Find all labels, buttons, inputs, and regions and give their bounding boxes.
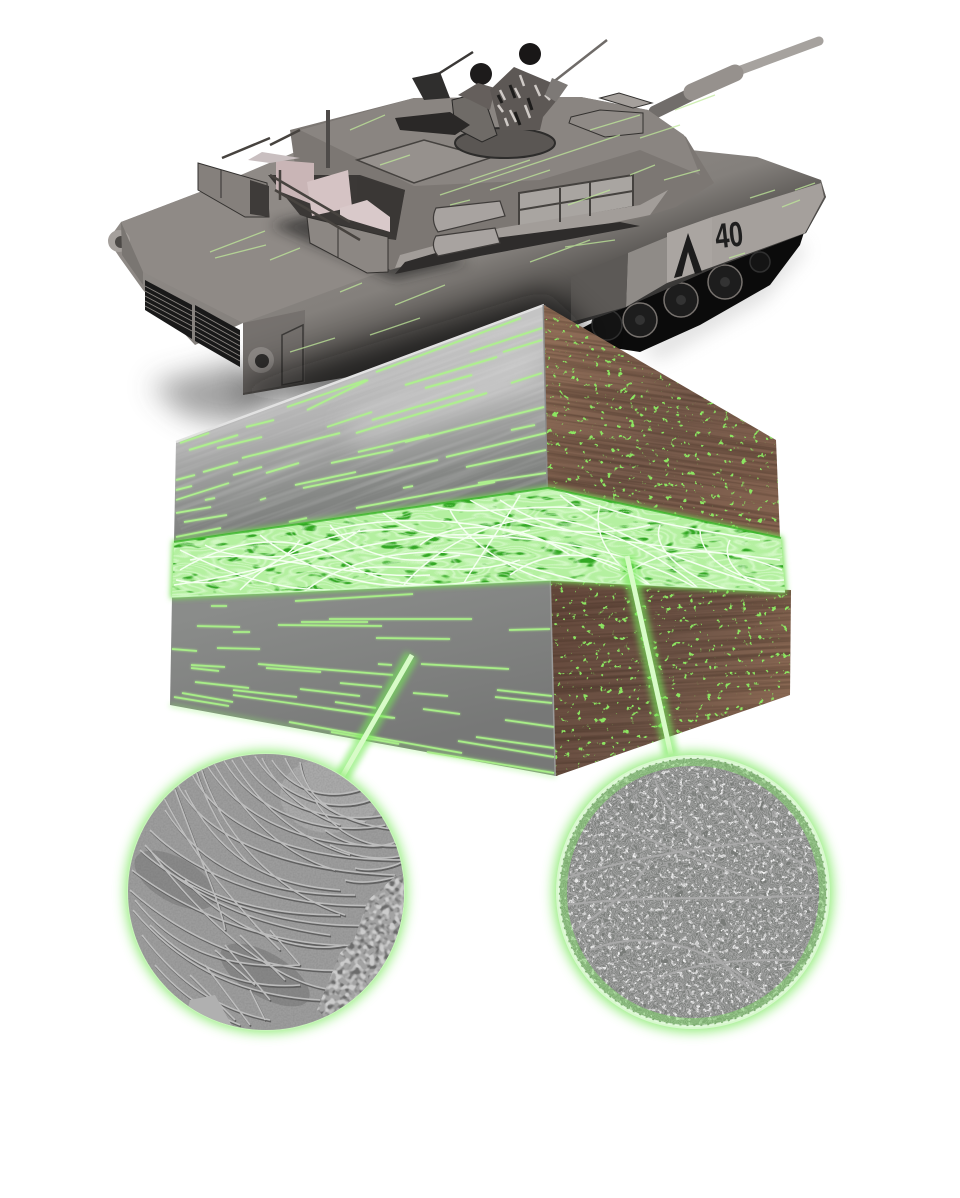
turret rails panel [519,175,633,227]
tank [108,40,826,400]
hull number: 40 [713,215,745,256]
fibres in bottom layer [172,594,554,773]
stowage bins [198,163,388,273]
fuel cylinders [433,201,505,256]
tank fibre highlights [210,95,815,352]
callout beam: right [627,556,671,755]
left machine gun [412,52,473,100]
illustration: tank above layered composite armour block with micrograph callouts [108,36,842,1042]
bustle rail [222,130,360,240]
bottom layer left face [170,580,556,776]
top layer left face [174,304,548,542]
hull chevron [674,233,702,278]
bottom layer right face [551,580,791,776]
right sight boxes [569,93,652,137]
bustle recess [268,175,405,240]
micrograph: random nanofibre mat [550,750,840,1035]
rear exhaust [108,222,143,285]
top hatch plate [357,140,490,183]
lower right granular cell [317,874,404,1017]
central fibre mat layer [160,480,800,605]
tracks and road wheels [560,226,806,352]
fibres in top layer [176,318,546,537]
tank ground shadow [150,240,806,425]
crew seat [452,92,497,142]
callout beam: left [342,655,412,777]
turret [198,40,714,274]
hull skirt plates [243,183,826,395]
crew member one [490,43,557,130]
rear grilles [145,280,240,367]
micrograph: aligned fibres [120,750,430,1040]
block shadow on hull [240,290,600,400]
pink cargo boxes [248,152,390,232]
top layer right face [544,305,780,538]
composite block [131,221,845,807]
turret side panel [357,177,405,235]
turret shadow on deck [270,210,470,280]
crew member two [458,63,495,110]
commander hatch ring [455,128,555,158]
bottom laminate layer [168,580,791,780]
top laminate layer [174,304,780,542]
gun barrel [655,41,819,112]
rear deck [121,190,400,323]
upper left granular cell [172,788,176,792]
right machine gun [545,40,607,102]
antenna [326,110,330,168]
hull body [108,130,826,395]
